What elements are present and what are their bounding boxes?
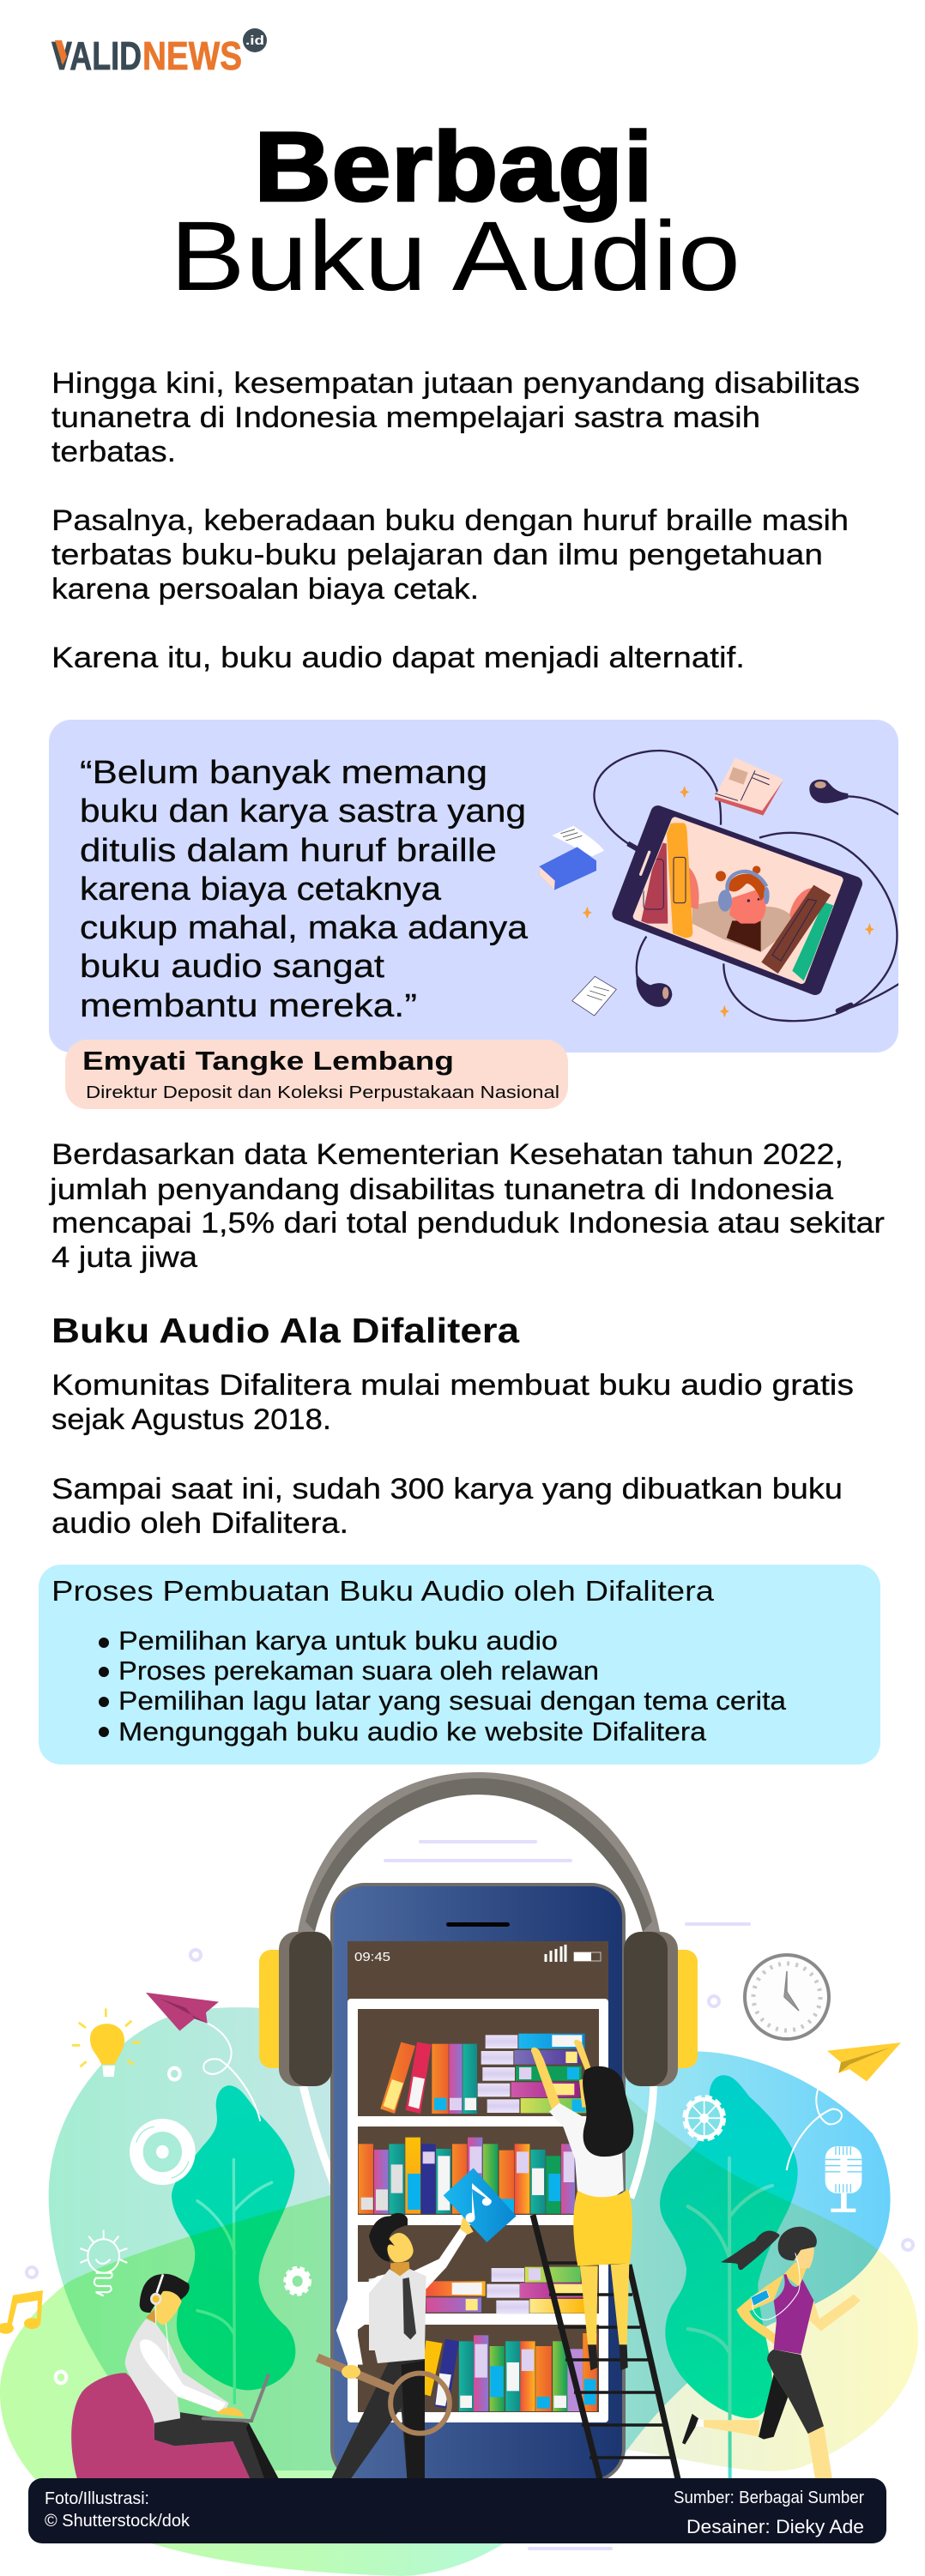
decorative rings and lines bbox=[27, 1842, 913, 2549]
quote text: karena biaya cetaknya bbox=[80, 872, 442, 908]
runner bbox=[682, 2227, 861, 2479]
intro paragraphs: Karena itu, buku audio dapat menjadi alternatif. bbox=[51, 642, 745, 674]
footer bar: Desainer: Dieky Ade bbox=[686, 2516, 864, 2537]
intro paragraphs bbox=[51, 367, 860, 674]
intro paragraphs: tunanetra di Indonesia mempelajari sastra masih bbox=[51, 401, 760, 434]
quote text: membantu mereka.” bbox=[80, 988, 417, 1024]
paragraph: Difalitera: Sampai saat ini, sudah 300 karya yang dibuatkan buku bbox=[51, 1473, 843, 1505]
ladder bbox=[533, 2215, 678, 2479]
shelf 2 books bbox=[359, 2138, 575, 2214]
intro paragraphs: terbatas. bbox=[51, 436, 176, 468]
process list bbox=[99, 1626, 787, 1746]
status bar bbox=[354, 1945, 601, 1964]
quote text bbox=[80, 755, 529, 1024]
illustration: background blobs and plants bbox=[0, 2007, 918, 2576]
left ear cup bbox=[259, 1932, 332, 2086]
intro paragraphs: Pasalnya, keberadaan buku dengan huruf braille masih bbox=[51, 504, 849, 537]
quote text: “Belum banyak memang bbox=[80, 755, 487, 791]
heading: Buku Audio Ala Difalitera bbox=[51, 1311, 520, 1350]
icon: magenta paper plane bbox=[146, 1993, 219, 2030]
icon: gear bbox=[684, 2096, 724, 2139]
paragraph: Difalitera: Komunitas Difalitera mulai membuat buku audio gratis bbox=[51, 1369, 854, 1402]
logo: Validnews.id: VALID bbox=[51, 33, 142, 78]
panel: quote bbox=[49, 720, 904, 1109]
paragraph: data: Berdasarkan data Kementerian Kesehatan tahun 2022, bbox=[51, 1138, 843, 1171]
icon: clock bbox=[745, 1955, 829, 2039]
title: Berbagi bbox=[254, 112, 653, 222]
icon: music note bbox=[0, 2290, 43, 2334]
right ear cup bbox=[624, 1932, 698, 2086]
intro paragraphs: terbatas buku-buku pelajaran dan ilmu pengetahuan bbox=[51, 539, 823, 571]
shelf 1 books bbox=[380, 2034, 588, 2114]
footer bar: © Shutterstock/dok bbox=[45, 2512, 190, 2531]
headphones bbox=[259, 1772, 698, 2086]
right icons bbox=[631, 2042, 901, 2479]
paragraph: Difalitera: audio oleh Difalitera. bbox=[51, 1507, 348, 1540]
intro paragraphs: Hingga kini, kesempatan jutaan penyandang disabilitas bbox=[51, 367, 860, 400]
footer bar: Sumber: Berbagai Sumber bbox=[674, 2489, 864, 2507]
paragraph: Difalitera bbox=[51, 1369, 854, 1540]
shelf 3 books bbox=[425, 2267, 586, 2314]
logo: Validnews.id: .id bbox=[245, 33, 264, 48]
white ring bbox=[169, 2068, 180, 2079]
panel: process bbox=[39, 1565, 880, 1765]
white ring bbox=[56, 2372, 66, 2383]
name tag: Direktur Deposit dan Koleksi Perpustakaan Nasional bbox=[86, 1083, 559, 1102]
intro paragraphs: karena persoalan biaya cetak. bbox=[51, 573, 479, 606]
illustration: phone bbox=[332, 1885, 624, 2481]
icon: microphone bbox=[825, 2146, 862, 2212]
quote text: ditulis dalam huruf braille bbox=[80, 833, 497, 869]
footer bar bbox=[28, 2478, 886, 2543]
paragraph: data: jumlah penyandang disabilitas tunanetra di Indonesia bbox=[49, 1173, 833, 1206]
status bar: 09:45 bbox=[354, 1950, 390, 1964]
footer bar: Foto/Illustrasi: bbox=[45, 2489, 149, 2508]
name tag bbox=[65, 1040, 568, 1109]
paragraph: data: mencapai 1,5% dari total penduduk Indonesia atau sekitar bbox=[51, 1207, 885, 1240]
seated man with laptop bbox=[125, 2274, 279, 2479]
process list: Proses perekaman suara oleh relawan bbox=[118, 1656, 599, 1686]
title: Buku Audio bbox=[170, 202, 741, 311]
headphone cable right bbox=[631, 2086, 654, 2198]
quote text: cukup mahal, maka adanya bbox=[80, 910, 529, 946]
process list: Mengunggah buku audio ke website Difalitera bbox=[118, 1716, 707, 1746]
left icons bbox=[0, 1993, 336, 2479]
paragraph: data bbox=[49, 1138, 885, 1274]
icon: light bulb bbox=[72, 2008, 141, 2077]
shelf 4 books bbox=[420, 2333, 597, 2411]
paragraph: Difalitera: sejak Agustus 2018. bbox=[51, 1403, 331, 1436]
panel: process: Proses Pembuatan Buku Audio oleh Difalitera bbox=[51, 1575, 715, 1607]
icon: gear bbox=[285, 2268, 310, 2295]
bookshelf books bbox=[359, 2034, 588, 2314]
process list: Pemilihan lagu latar yang sesuai dengan tema cerita bbox=[118, 1686, 787, 1716]
quote text: buku dan karya sastra yang bbox=[80, 793, 526, 830]
paragraph: data: 4 juta jiwa bbox=[51, 1241, 197, 1274]
flight path bbox=[787, 2086, 842, 2170]
beanbag bbox=[71, 2373, 251, 2479]
standing man with magnifier bbox=[317, 2213, 474, 2478]
name tag: Emyati Tangke Lembang bbox=[82, 1046, 454, 1076]
icon: yellow paper plane bbox=[827, 2042, 901, 2081]
flight path bbox=[203, 2024, 260, 2121]
music card bbox=[444, 2168, 517, 2242]
woman on ladder bbox=[531, 2040, 633, 2370]
icon: disc bbox=[130, 2119, 196, 2185]
title bbox=[170, 112, 741, 311]
logo: Validnews.id bbox=[51, 28, 267, 78]
logo: Validnews.id: NEWS bbox=[142, 33, 242, 78]
icon: bulb outline bbox=[80, 2230, 127, 2295]
process list: Pemilihan karya untuk buku audio bbox=[118, 1626, 558, 1656]
quote text: buku audio sangat bbox=[80, 949, 384, 985]
illustration: phone with earphones and books bbox=[539, 751, 904, 1021]
headphone cable left bbox=[303, 2086, 336, 2188]
